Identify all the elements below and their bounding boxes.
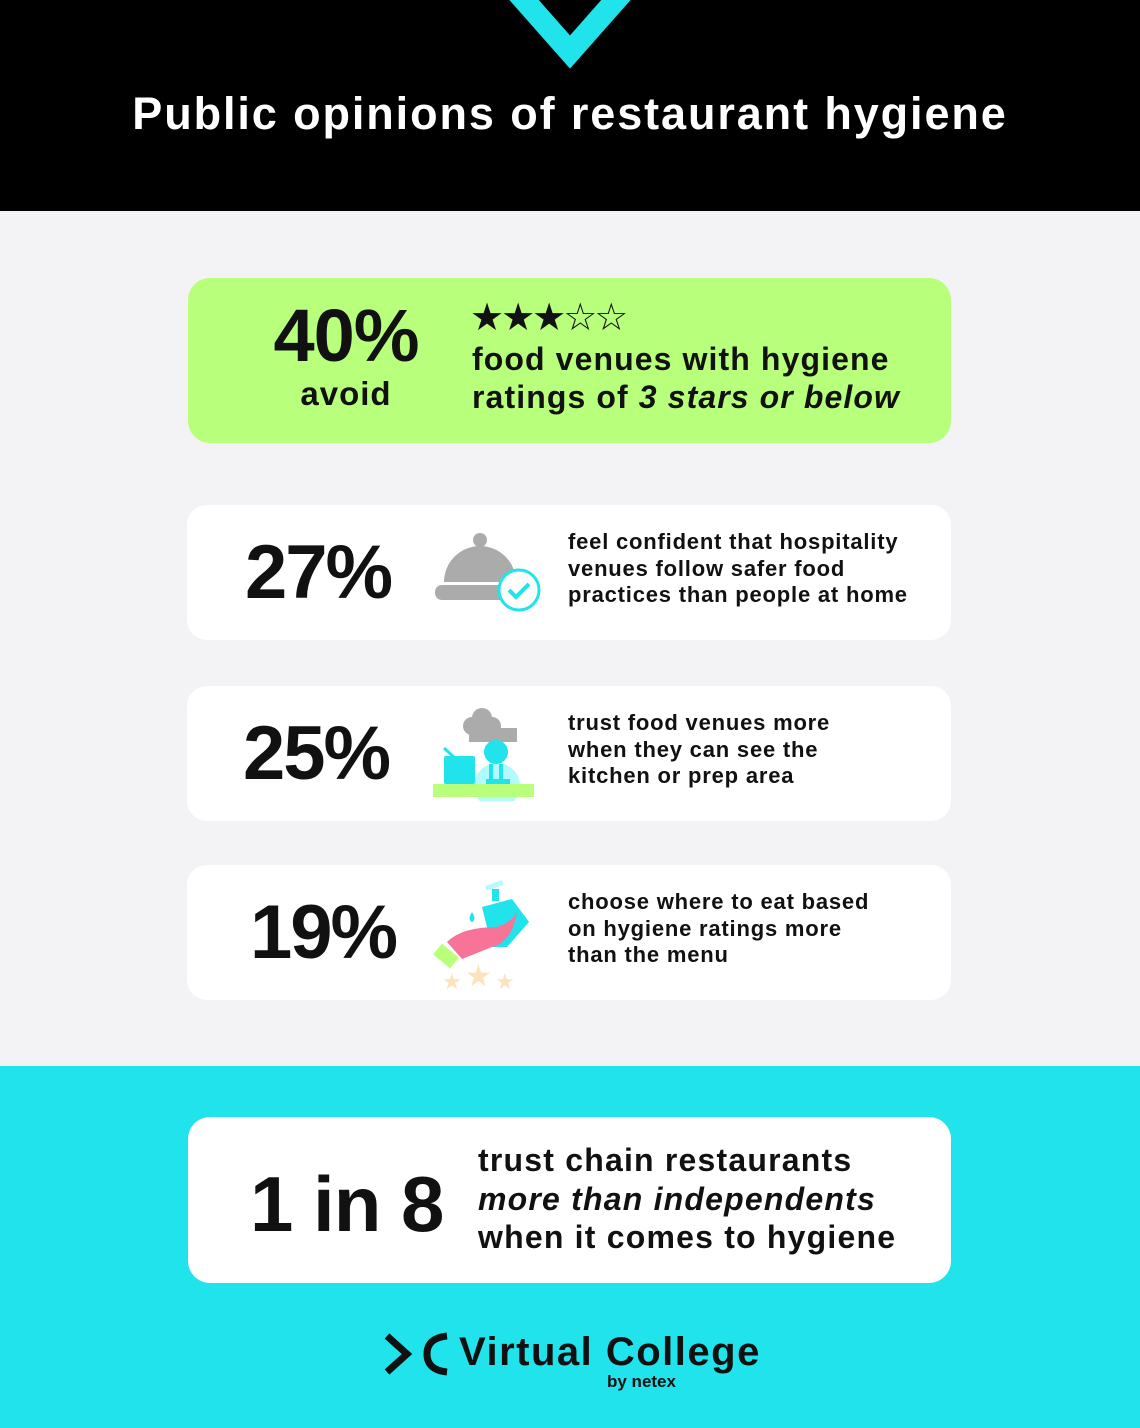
panel: 19% (187, 865, 951, 1000)
icon: cloche (435, 533, 540, 612)
panel: 27% (187, 505, 951, 640)
panel: 40% (188, 278, 951, 443)
text (568, 529, 908, 607)
text: kitchen or prep area (568, 763, 794, 788)
stat 40%: avoid (300, 375, 392, 412)
text: food venues with hygiene (472, 341, 890, 377)
text: ratings of 3 stars or below (472, 379, 900, 415)
text: practices than people at home (568, 582, 908, 607)
footer section (0, 1066, 1140, 1428)
logo: by netex (607, 1372, 676, 1391)
text: more than independents (478, 1180, 876, 1216)
text (478, 1142, 896, 1255)
icon: hand soap (433, 880, 529, 992)
stat 40%: 40% (273, 294, 419, 377)
text: when it comes to hygiene (478, 1219, 896, 1255)
text: trust food venues more (568, 710, 830, 735)
text: feel confident that hospitality (568, 529, 898, 554)
text: when they can see the (568, 736, 818, 762)
icon: chevron (510, 0, 630, 68)
text: choose where to eat based (568, 889, 869, 914)
text: on hygiene ratings more (568, 916, 842, 940)
stat: 1 in 8 (250, 1160, 443, 1248)
text: than the menu (568, 942, 729, 967)
stars: ★★★☆☆ (470, 297, 625, 339)
text (472, 341, 901, 415)
panel: 1 in 8 (188, 1117, 951, 1283)
text: trust chain restaurants (478, 1142, 852, 1178)
stat: 25% (243, 711, 389, 796)
text (568, 710, 830, 788)
stat: 19% (250, 890, 396, 975)
text (568, 889, 869, 967)
icon: chef kitchen (433, 708, 534, 801)
logo (384, 1330, 761, 1391)
title: Public opinions of restaurant hygiene (132, 88, 1008, 139)
panel: 25% (187, 686, 951, 821)
icon: logo mark (384, 1332, 448, 1376)
header (0, 0, 1140, 211)
stat: 27% (245, 530, 391, 615)
logo: Virtual College (459, 1330, 761, 1374)
text: venues follow safer food (568, 556, 845, 580)
